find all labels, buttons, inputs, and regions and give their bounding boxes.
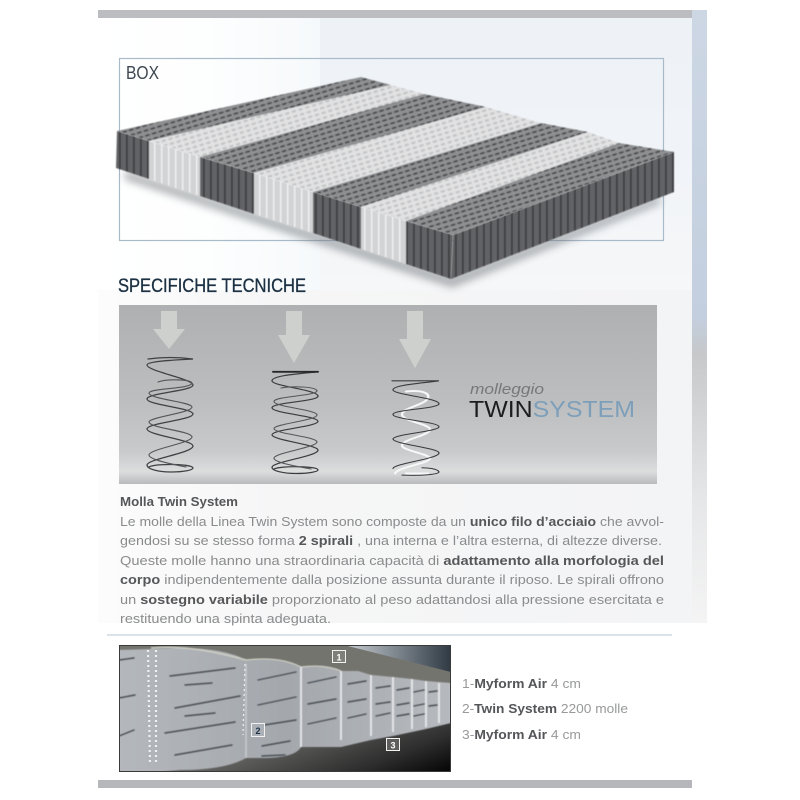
callout 2: 2 — [255, 726, 261, 736]
label: BOX: BOX — [126, 63, 159, 83]
mattress illustration — [116, 77, 674, 288]
arrow: force on first spring — [153, 311, 185, 349]
upper foam layer — [120, 646, 450, 683]
mattress right side — [451, 152, 674, 279]
heading: specifiche tecniche: SPECIFICHE TECNICHE — [118, 275, 306, 297]
panel: twin system springs — [119, 305, 657, 484]
callout 1 — [332, 650, 346, 662]
arrow: force on third spring — [399, 311, 431, 368]
bottom bar — [98, 780, 692, 788]
callout 1: 1 — [336, 652, 342, 662]
logo: molleggio twin system: TWINSYSTEM — [469, 396, 635, 422]
legend: mattress layers — [462, 676, 628, 742]
text block: molla twin system: corpo indipendentemente dalla posizione assunta durante il riposo. Le spirali offrono — [120, 572, 664, 587]
right side strip — [692, 10, 707, 623]
text block: molla twin system: restituendo una spinta adeguata. — [120, 611, 331, 626]
spring wire shadows — [119, 658, 437, 756]
logo: molleggio twin system: molleggio — [470, 382, 544, 398]
spring 2 — [272, 372, 318, 474]
legend item 3: 3-Myform Air 4 cm — [462, 727, 581, 742]
callout 2 — [252, 724, 264, 736]
box frame with label — [120, 58, 664, 240]
spring 1 — [147, 358, 193, 472]
top bar — [98, 10, 692, 18]
background: upper page panel — [98, 10, 692, 623]
callout 3: 3 — [390, 740, 396, 750]
mattress top face stripes — [117, 77, 674, 235]
text block: molla twin system: Queste molle hanno una straordinaria capacità di adattamento alla morfologia del — [120, 553, 664, 568]
logo: molleggio twin system — [469, 382, 635, 422]
photo: mattress cross-section — [119, 645, 451, 772]
callout 3 — [386, 738, 400, 750]
text block: molla twin system — [120, 495, 664, 626]
text block: molla twin system: gendosi su se stesso forma 2 spirali , una interna e l’altra esterna, di altezze diverse. — [120, 533, 662, 548]
text heading: Molla Twin System — [120, 495, 238, 509]
text block: molla twin system: un sostegno variabile proporzionato al peso adattandosi alla pressione esercitata e — [120, 592, 664, 607]
text block: molla twin system: Le molle della Linea Twin System sono composte da un unico filo d’acciaio che avvol- — [120, 514, 664, 529]
mattress left side stripes — [116, 131, 453, 279]
spring pockets — [119, 647, 451, 772]
spring 3 — [392, 381, 439, 475]
pocket stitching — [148, 650, 245, 765]
legend item 1: 1-Myform Air 4 cm — [462, 676, 581, 691]
legend item 2: 2-Twin System 2200 molle — [462, 701, 628, 716]
arrow: force on second spring — [278, 311, 310, 363]
